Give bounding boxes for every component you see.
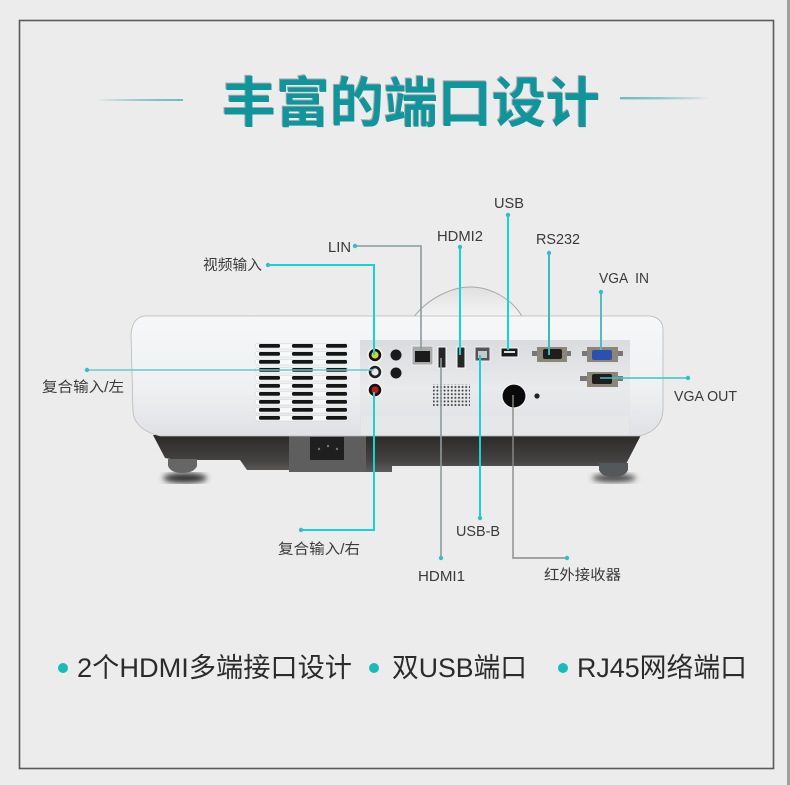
vents	[259, 344, 347, 420]
vent slats	[255, 344, 348, 421]
RCA jacks	[368, 348, 382, 397]
USB-B port	[475, 347, 490, 361]
callout labels: 视频输入	[203, 257, 262, 274]
callout labels: 复合输入/右	[278, 540, 360, 558]
callout labels: RS232	[536, 232, 580, 248]
title: 丰富的端口设计	[222, 74, 600, 134]
callout labels: HDMI2	[437, 229, 483, 245]
feature: RJ45: RJ45网络端口	[577, 653, 747, 683]
connector panel	[360, 340, 630, 435]
title rule left	[95, 99, 183, 101]
callout labels: USB	[494, 196, 524, 212]
callout labels: VGA OUT	[674, 389, 737, 405]
RJ45 port	[412, 346, 433, 365]
HDMI ports	[438, 347, 465, 368]
left foot	[168, 459, 197, 473]
callout labels: 复合输入/左	[42, 378, 124, 396]
foot shadows	[163, 473, 636, 483]
callout lines	[87, 215, 688, 558]
VGA IN port	[582, 347, 623, 362]
USB-A port	[501, 348, 518, 357]
power socket	[289, 436, 366, 472]
projector	[131, 287, 663, 483]
right foot	[599, 463, 628, 477]
feature: dual USB: 双USB端口	[392, 653, 527, 683]
white body	[131, 316, 663, 436]
callout labels: HDMI1	[418, 569, 465, 585]
callout labels: VGA IN	[599, 271, 649, 287]
callout labels: 红外接收器	[544, 567, 622, 584]
feature list	[58, 653, 747, 683]
dark base	[153, 435, 641, 472]
callout labels: LIN	[328, 240, 351, 256]
callout labels	[42, 196, 737, 585]
title: 丰富的端口设计	[221, 73, 599, 133]
lens dome	[413, 287, 523, 318]
callout labels: USB-B	[456, 524, 500, 540]
VGA OUT port	[580, 372, 623, 387]
feature: dual HDMI: 2个HDMI多端接口设计	[77, 653, 352, 683]
audio jacks	[390, 350, 402, 378]
speaker grille	[433, 384, 470, 406]
RS232 port	[532, 347, 571, 362]
callout dots	[85, 213, 690, 560]
IR receiver	[502, 384, 540, 408]
title rule right	[620, 97, 710, 99]
